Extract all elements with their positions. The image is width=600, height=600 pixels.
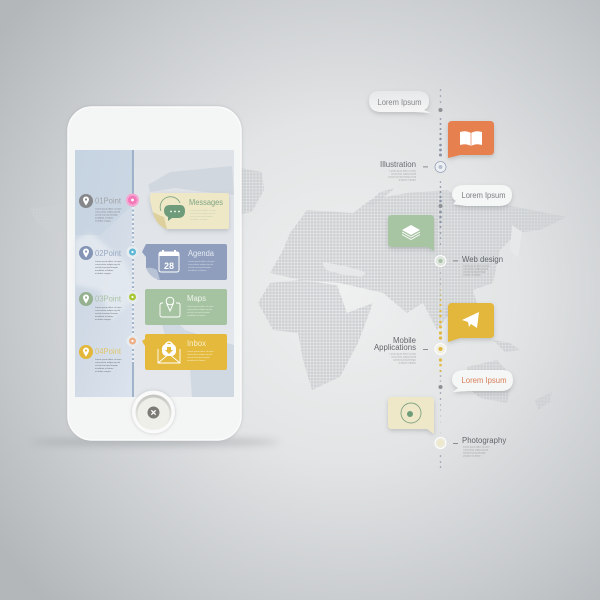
point 04: 04Point	[95, 347, 122, 356]
label: web design	[453, 255, 503, 276]
phone shadow	[30, 438, 280, 446]
label: mobile applications	[374, 336, 428, 364]
pill: lorem ipsum lower: Lorem Ipsum	[462, 375, 506, 385]
pill: lorem ipsum middle	[452, 185, 512, 206]
point 01: Lorem ipsum dolor sit amet	[95, 208, 122, 210]
point 03: Lorem ipsum dolor sit amet	[95, 306, 122, 309]
point 04: sed do eiusmod tempor	[95, 364, 118, 367]
card: inbox: Lorem ipsum dolor sit amet	[187, 350, 214, 353]
card: maps: Lorem ipsum dolor sit amet	[187, 305, 214, 308]
card: inbox: Inbox	[187, 339, 206, 348]
point 03: et dolore magna	[95, 318, 112, 321]
node: illustration	[435, 162, 446, 172]
card: messages: sed do eiusmod tempor	[190, 215, 213, 218]
card: maps: incididunt ut labore	[187, 314, 206, 317]
point 01: 01Point	[95, 196, 122, 206]
point 01: consectetur adipiscing elit	[95, 210, 120, 214]
point 04: incididunt ut labore	[95, 367, 114, 370]
card: agenda: consectetur adipiscing elit	[188, 263, 213, 266]
pill: lorem ipsum lower	[452, 370, 513, 392]
dotted timeline	[438, 89, 442, 468]
card: maps	[145, 289, 227, 325]
world map	[30, 168, 567, 410]
point 03: 03Point	[95, 294, 122, 304]
label: web design: sed do eiusmod tempor	[463, 270, 486, 274]
point 02: 02Point	[95, 249, 122, 258]
card: messages: consectetur adipiscing elit	[190, 212, 215, 215]
label: photography: Photography	[462, 436, 506, 445]
point 04	[79, 345, 122, 373]
point 04: Lorem ipsum dolor sit amet	[95, 358, 122, 361]
home button	[132, 390, 175, 434]
card: messages	[150, 193, 229, 229]
bubble: target	[388, 397, 434, 434]
label: illustration: ut labore et dolore	[398, 178, 417, 182]
label: illustration: Lorem ipsum dolor sit amet	[390, 170, 416, 172]
card: messages: Messages	[189, 198, 223, 207]
card: agenda: sed do eiusmod tempor	[188, 266, 211, 269]
label: illustration: consectetur adipiscing elit	[391, 172, 416, 176]
point 02: Lorem ipsum dolor sit amet	[95, 260, 122, 263]
label: web design: consectetur adipiscing elit	[463, 268, 488, 270]
card: inbox	[142, 334, 227, 370]
label: photography	[453, 436, 506, 458]
node: web design	[435, 256, 446, 266]
card: messages: incididunt ut labore	[190, 218, 209, 221]
phone body	[68, 107, 241, 440]
card: maps: sed do eiusmod tempor	[187, 311, 210, 314]
label: illustration	[380, 160, 428, 182]
label: mobile applications: sed do eiusmod tempor	[393, 358, 416, 362]
pill: lorem ipsum middle: Lorem Ipsum	[462, 190, 506, 200]
point 03: incididunt ut labore	[95, 315, 114, 318]
point 01: et dolore magna	[95, 220, 112, 222]
point 02: et dolore magna	[95, 272, 112, 275]
card: messages: Lorem ipsum dolor sit amet	[190, 209, 217, 212]
point 03: sed do eiusmod tempor	[95, 312, 118, 315]
label: mobile applications: ut labore et dolore	[398, 362, 417, 364]
node: photography	[435, 438, 446, 448]
label: illustration: sed do eiusmod tempor incid	[388, 176, 417, 178]
card: inbox: consectetur adipiscing elit	[187, 353, 212, 356]
point 03: consectetur adipiscing elit	[95, 309, 120, 312]
bubble: book	[448, 121, 494, 158]
label: photography: consectetur adipiscing elit	[463, 448, 488, 452]
label: illustration: Illustration	[380, 160, 416, 169]
label: photography: Lorem ipsum dolor sit amet	[463, 446, 490, 448]
label: photography: sed do eiusmod tempor	[463, 452, 486, 454]
card: agenda	[142, 244, 227, 280]
pill: lorem ipsum top	[369, 91, 431, 113]
point 03	[79, 292, 122, 321]
card: maps: consectetur adipiscing elit	[187, 308, 212, 311]
card: agenda: Lorem ipsum dolor sit amet	[188, 260, 215, 263]
label: mobile applications: consectetur adipiscing elit	[391, 356, 416, 358]
card: agenda: Agenda	[188, 249, 215, 258]
point 02: incididunt ut labore	[95, 269, 114, 272]
label: photography: ut labore et dolore	[463, 454, 481, 458]
point 04: consectetur adipiscing elit	[95, 361, 120, 364]
point 01: incididunt ut labore	[95, 216, 114, 220]
point 01	[79, 194, 122, 222]
label: web design: ut labore et dolore	[463, 274, 481, 276]
card: inbox: sed do eiusmod tempor	[187, 356, 210, 359]
card: agenda: incididunt ut labore	[188, 269, 207, 272]
bubble: paper plane	[448, 303, 494, 342]
pill: lorem ipsum top: Lorem Ipsum	[378, 97, 422, 107]
label: web design: Web design	[462, 255, 503, 264]
node: mobile applications	[435, 344, 446, 354]
point 02: consectetur adipiscing elit	[95, 263, 120, 266]
bubble: layers	[388, 215, 434, 251]
phone screen	[75, 150, 234, 397]
label: web design: Lorem ipsum dolor sit amet	[463, 264, 490, 268]
card: agenda: 28	[164, 261, 174, 271]
card: inbox: incididunt ut labore	[187, 359, 206, 362]
label: mobile applications: Mobile	[393, 336, 416, 345]
card: maps: Maps	[187, 294, 206, 303]
phone	[68, 107, 241, 440]
point 02: sed do eiusmod tempor	[95, 266, 118, 269]
label: mobile applications: Applications	[374, 343, 416, 352]
point 04: et dolore magna	[95, 370, 112, 373]
timeline dots	[126, 194, 139, 347]
label: mobile applications: Lorem ipsum dolor sit amet	[390, 352, 416, 356]
point 01: sed do eiusmod tempor	[95, 214, 118, 216]
point 02	[79, 246, 122, 275]
